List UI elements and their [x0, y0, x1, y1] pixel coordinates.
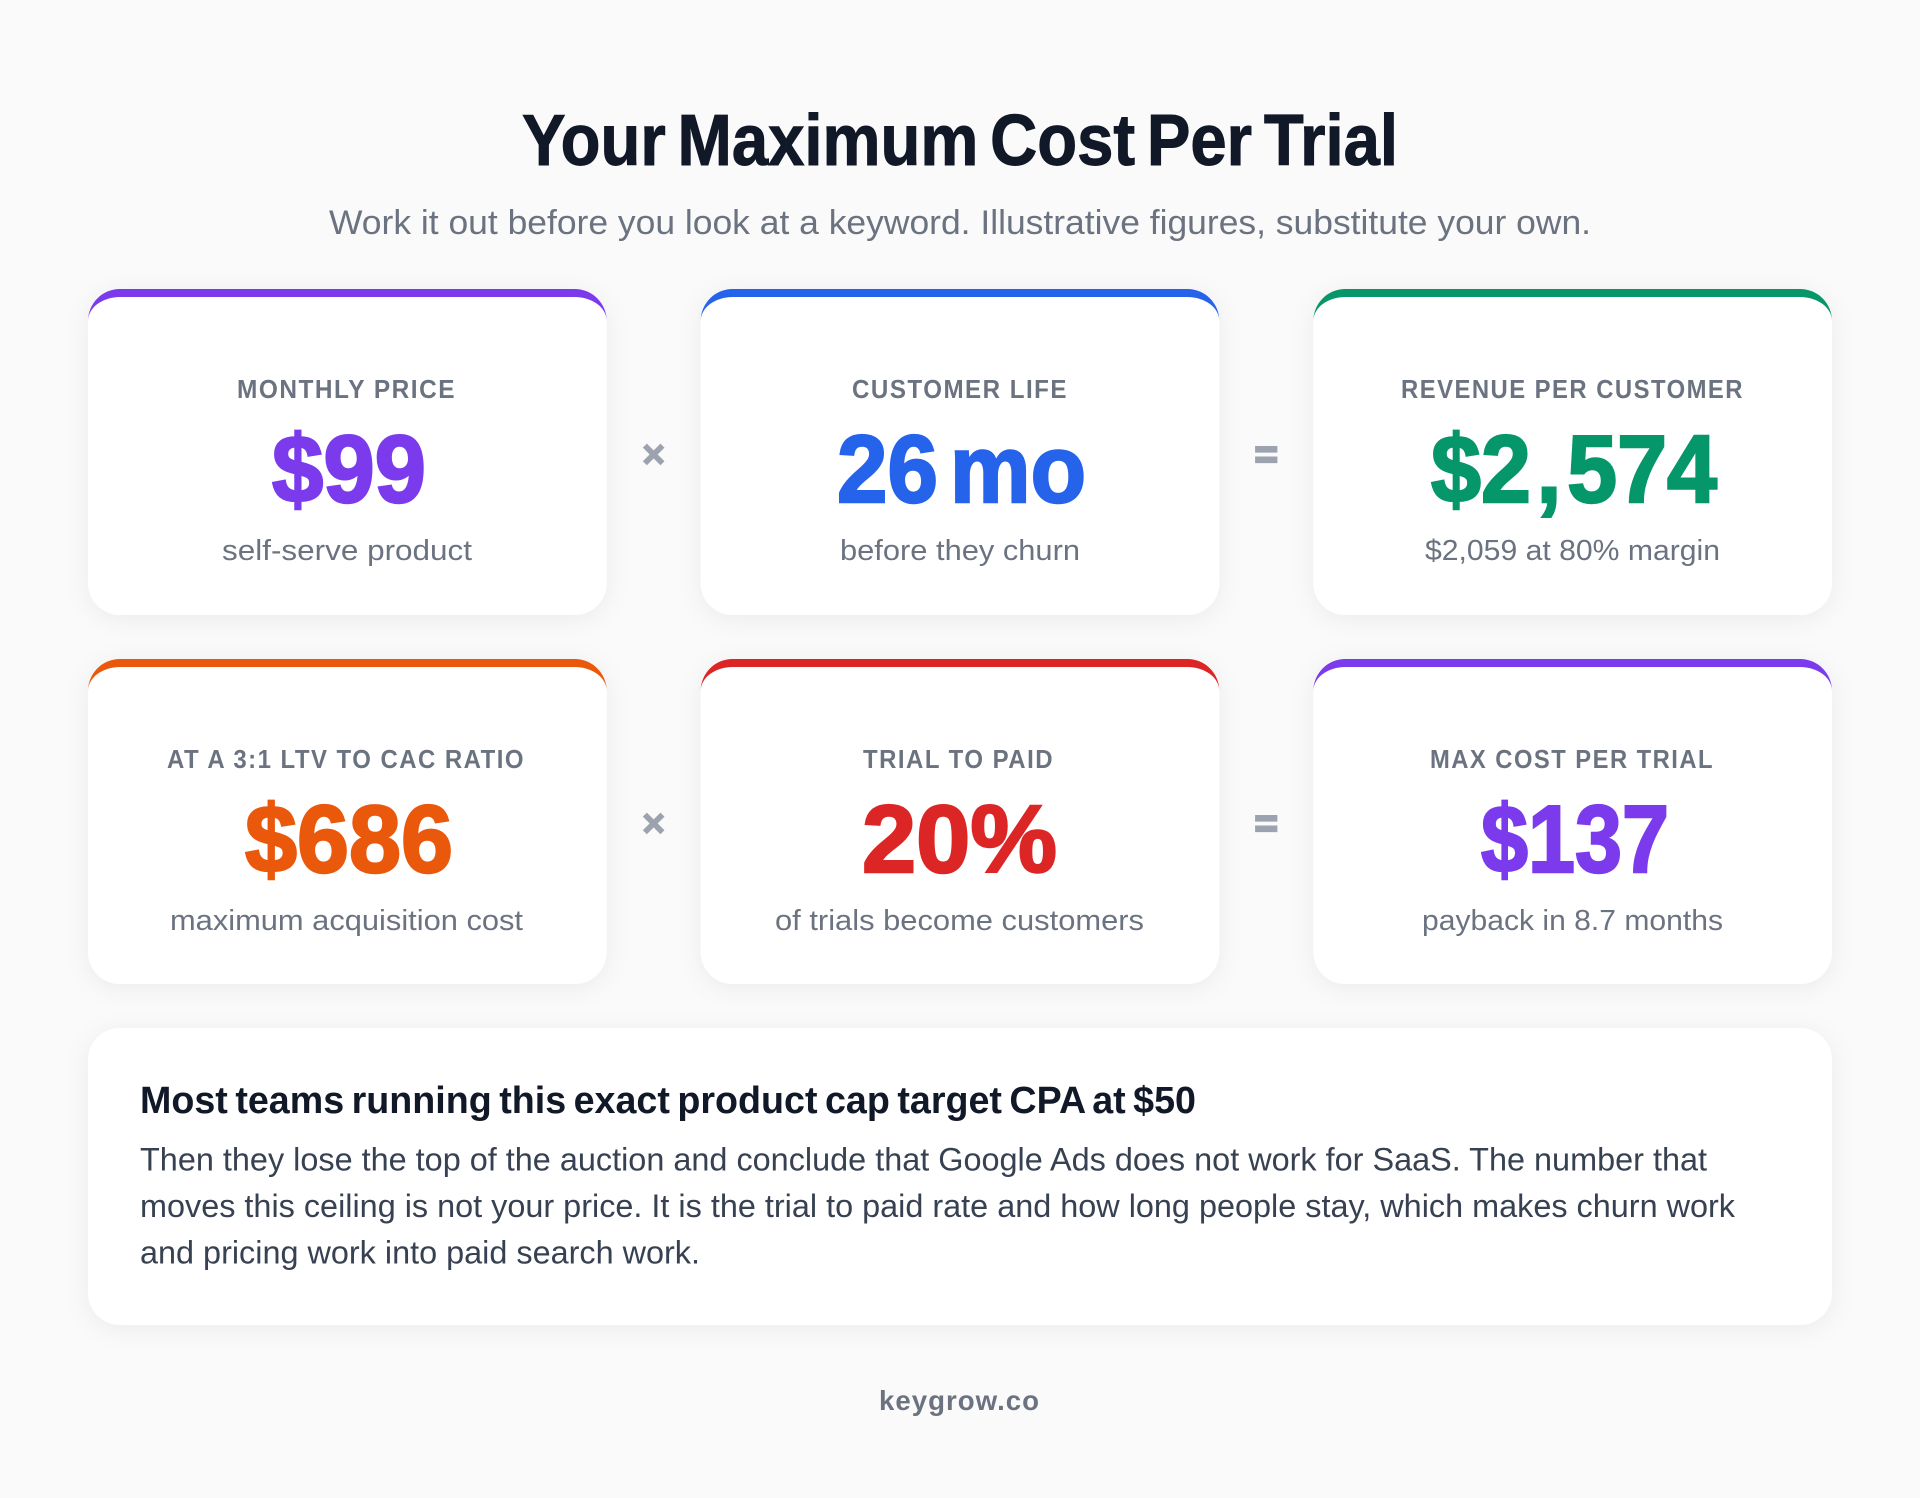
panel: monthly price: $99: [272, 416, 426, 523]
panel: customer life: [701, 289, 1219, 615]
panel: trial to paid: 20%: [862, 786, 1057, 893]
panel: customer life: 26 mo: [837, 416, 1086, 523]
panel: takeaway callout: and pricing work into paid search work.: [140, 1234, 700, 1270]
panel: max cost per trial: [1313, 659, 1832, 984]
panel: takeaway callout: Most teams running this exact product cap target CPA at $50: [140, 1080, 1196, 1122]
panel: maximum acquisition cost: maximum acquisition cost: [170, 905, 523, 937]
panel: takeaway callout: [88, 1028, 1832, 1325]
operator: multiply: ×: [640, 434, 667, 472]
panel: monthly price: self-serve product: [222, 535, 472, 567]
panel: maximum acquisition cost: [88, 659, 607, 984]
panel: takeaway callout: moves this ceiling is not your price. It is the trial to paid rate and how long people stay, which makes churn work: [140, 1188, 1736, 1224]
panel: max cost per trial: MAX COST PER TRIAL: [1430, 744, 1714, 774]
panel: trial to paid: TRIAL TO PAID: [863, 744, 1054, 774]
panel: trial to paid: of trials become customers: [775, 905, 1144, 937]
panel: customer life: CUSTOMER LIFE: [852, 374, 1068, 404]
panel: takeaway callout: Then they lose the top of the auction and conclude that Google Ads does not work for SaaS. The number that: [140, 1142, 1707, 1178]
operator: equals: =: [1252, 796, 1281, 849]
panel: revenue per customer: REVENUE PER CUSTOMER: [1401, 374, 1744, 404]
panel: customer life: before they churn: [840, 535, 1080, 567]
panel: max cost per trial: payback in 8.7 months: [1422, 905, 1723, 937]
footer: keygrow.co: keygrow.co: [879, 1385, 1040, 1416]
panel: monthly price: [88, 289, 607, 615]
panel: revenue per customer: $2,574: [1431, 416, 1717, 523]
panel: revenue per customer: $2,059 at 80% margin: [1425, 535, 1720, 567]
operator: multiply: ×: [640, 804, 667, 842]
panel: revenue per customer: [1313, 289, 1832, 615]
panel: maximum acquisition cost: $686: [245, 786, 453, 893]
panel: trial to paid: [701, 659, 1219, 984]
panel: monthly price: MONTHLY PRICE: [237, 374, 456, 404]
panel: max cost per trial: $137: [1481, 786, 1669, 893]
title: Your Maximum Cost Per Trial: [522, 101, 1398, 181]
subtitle: Work it out before you look at a keyword. Illustrative figures, substitute your own.: [329, 204, 1591, 242]
operator: equals: =: [1252, 427, 1281, 481]
panel: maximum acquisition cost: AT A 3:1 LTV TO CAC RATIO: [167, 744, 525, 774]
